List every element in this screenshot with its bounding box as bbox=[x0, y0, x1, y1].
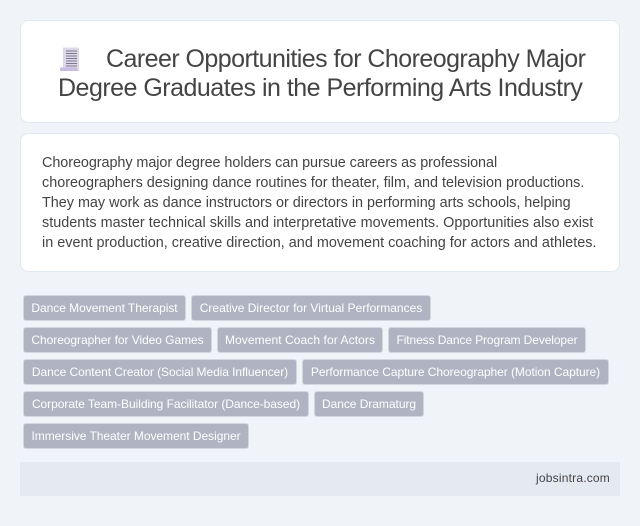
tag: Performance Capture Choreographer (Motion Capture) bbox=[311, 365, 600, 379]
tag bbox=[388, 327, 586, 353]
tag bbox=[23, 391, 309, 417]
footer text: jobsintra.com bbox=[536, 471, 610, 485]
tag: Immersive Theater Movement Designer bbox=[31, 429, 241, 443]
tag bbox=[191, 295, 431, 321]
tag bbox=[23, 327, 212, 353]
description line 1: Choreography major degree holders can pursue careers as professional bbox=[42, 155, 497, 171]
tag bbox=[23, 423, 249, 449]
tag bbox=[314, 391, 424, 417]
panel: description card bbox=[20, 133, 620, 272]
footer bar bbox=[20, 462, 620, 496]
description line 4: students master technical skills and interpretative movements. Opportunities also exist bbox=[42, 215, 593, 231]
tag: Dance Dramaturg bbox=[322, 397, 416, 411]
tag: Choreographer for Video Games bbox=[31, 333, 204, 347]
title line 2: Degree Graduates in the Performing Arts Industry bbox=[58, 74, 582, 102]
tag bbox=[23, 295, 186, 321]
tag: Corporate Team-Building Facilitator (Dance-based) bbox=[32, 397, 300, 411]
tag: Dance Content Creator (Social Media Influencer) bbox=[32, 365, 288, 379]
tag: Fitness Dance Program Developer bbox=[396, 333, 577, 347]
description line 2: choreographers designing dance routines for theater, film, and television productions. bbox=[42, 175, 584, 191]
icon: document scroll bbox=[60, 48, 79, 72]
tag: Dance Movement Therapist bbox=[31, 301, 178, 315]
panel: title card bbox=[20, 20, 620, 123]
tag: Movement Coach for Actors bbox=[225, 333, 375, 347]
tag bbox=[217, 327, 383, 353]
tag: Creative Director for Virtual Performances bbox=[200, 301, 422, 315]
title line 1: Career Opportunities for Choreography Major bbox=[106, 45, 585, 73]
description line 3: They may work as dance instructors or directors in performing arts schools, helping bbox=[42, 195, 571, 211]
tag bbox=[302, 359, 609, 385]
tag bbox=[23, 359, 297, 385]
description line 5: in event production, creative direction, and movement coaching for actors and athletes. bbox=[42, 235, 596, 251]
